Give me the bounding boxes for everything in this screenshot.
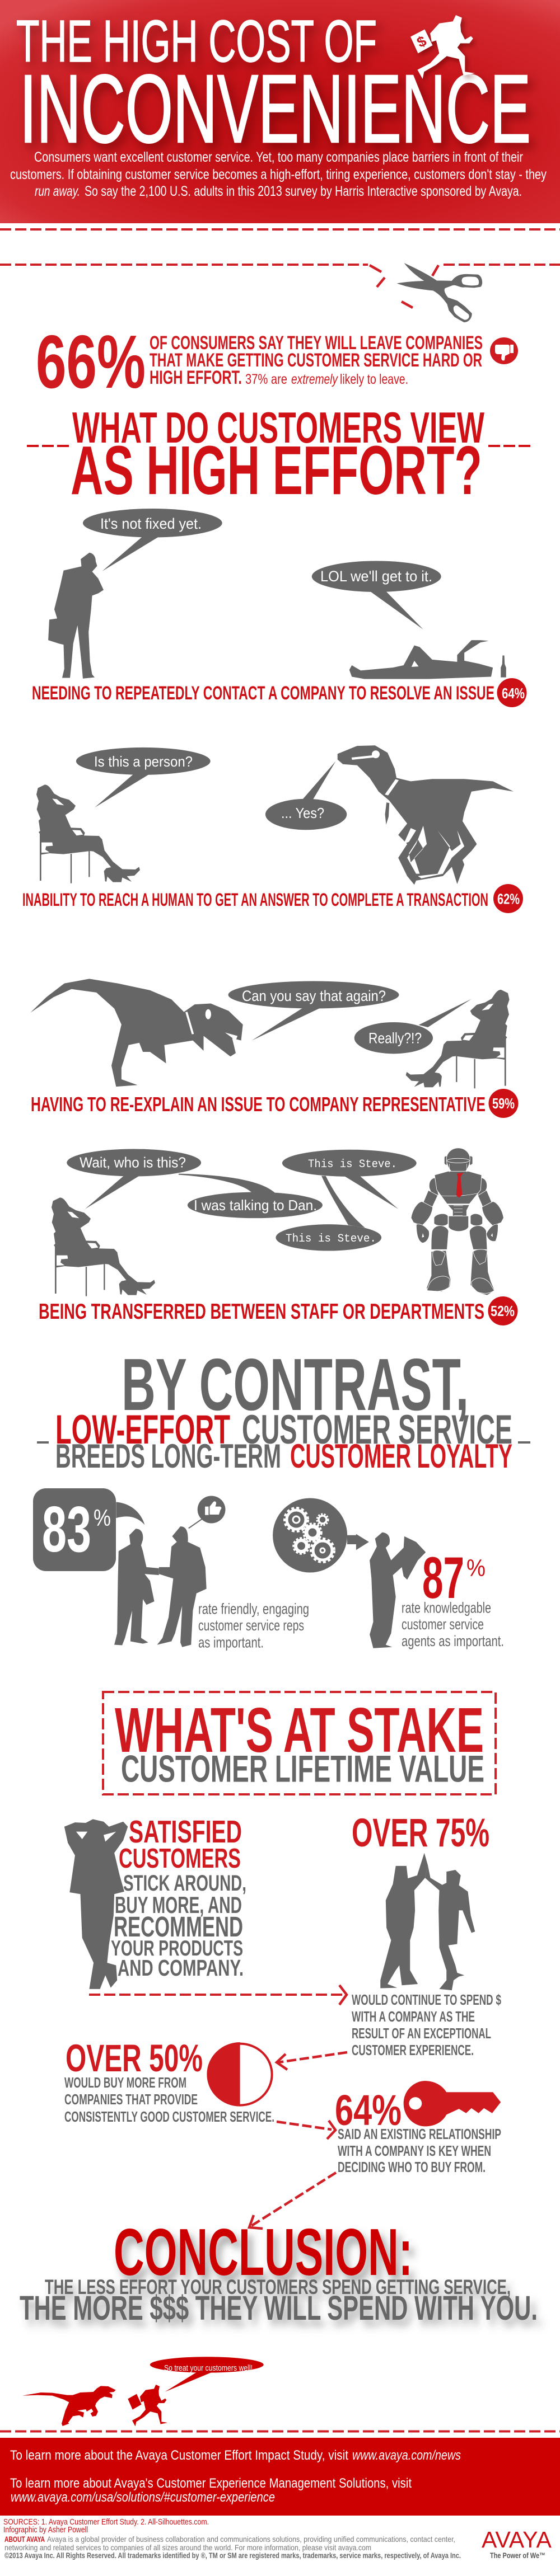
text: satisfied customers stick around: YOUR PRODUCTS: [111, 1936, 243, 1961]
logo: avaya: AVAYA: [482, 2527, 552, 2553]
stat: 87 percent: %: [466, 1555, 486, 1582]
figure: red raptor: [22, 2386, 116, 2426]
text: would continue to spend: CUSTOMER EXPERIENCE.: [352, 2042, 474, 2058]
stat: 66 percent: [36, 319, 518, 404]
footer: sources: SOURCES: 1. Avaya Customer Effort Study. 2. All-Silhouettes.com.: [3, 2517, 209, 2527]
text: would continue to spend: WITH A COMPANY AS THE: [352, 2008, 475, 2025]
icon: running man with briefcase: [410, 15, 475, 79]
icon: thumbs up: [189, 1496, 225, 1528]
footer: about avaya: ABOUT AVAYA: [4, 2535, 45, 2544]
figure: high five: [380, 1853, 475, 1990]
speech bubble: so treat your customers well: [150, 2357, 264, 2392]
panel: over 50 percent: [64, 2037, 274, 2125]
panel: over 75 percent: [352, 1811, 501, 2058]
subheading: low-effort customer service: [37, 1407, 530, 1452]
panel: 64 percent: [335, 2081, 501, 2175]
callout: 83 percent box: 83: [42, 1493, 91, 1566]
panel: raptor chasing businessman: [22, 2357, 264, 2427]
speech bubble: can you say that again: Can you say that again?: [242, 988, 386, 1004]
icon: scissors cutting dashed line: [0, 263, 560, 322]
speech bubble: this is steve bottom: This is Steve.: [286, 1233, 376, 1245]
speech bubble: it's not fixed yet: It's not fixed yet.: [100, 515, 202, 532]
link text: solutions: To learn more about Avaya's Customer Experience Management Solutions, visit: [10, 2476, 412, 2491]
figure: red running man: [128, 2385, 167, 2427]
text: satisfied customers stick around: AND COMPANY.: [118, 1955, 244, 1981]
heading box: what's at stake: [103, 1692, 496, 1794]
speech bubble: this is steve top: [282, 1150, 417, 1209]
panel: repeatedly contact a company: [32, 509, 526, 707]
speech bubble: really: [354, 999, 472, 1054]
speech bubble: lol we'll get to it: [312, 561, 441, 629]
stat description: HIGH EFFORT.: [150, 367, 242, 388]
badge: 62 percent: 62%: [497, 891, 520, 908]
badge: 59 percent: [488, 1089, 519, 1118]
speech bubble: lol we'll get to it: LOL we'll get to it.: [320, 568, 432, 585]
intro paragraph: run away.: [35, 184, 80, 199]
text: rate knowledgable: [402, 1599, 504, 1649]
panel: red header: [0, 0, 560, 223]
footer: about avaya: networking and related services to companies of all sizes around the world. For more information, please visit avaya.com: [4, 2543, 371, 2552]
stat description: likely to leave.: [340, 372, 408, 387]
speech bubble: is this a person: [76, 748, 211, 807]
figure: man on phone with briefcase: [48, 553, 104, 679]
icon: gears in circle: [273, 1498, 347, 1572]
text: rate knowledgable: rate knowledgable: [402, 1599, 491, 1616]
speech bubble: yes: ... Yes?: [281, 805, 324, 821]
arrow: gears to reader: [347, 1534, 369, 1550]
text: satisfied customers stick around: BUY MORE, AND: [115, 1892, 242, 1918]
speech bubble: so treat your customers well: So treat your customers well!: [164, 2363, 253, 2373]
panel: 83 percent friendly reps: [33, 1488, 309, 1651]
badge: 52 percent: [488, 1296, 517, 1325]
text: satisfied customers stick around: CUSTOMERS: [119, 1844, 241, 1874]
link text: solutions: www.avaya.com/usa/solutions/#customer-experience: [11, 2490, 275, 2505]
panel: over 75 percent: OVER 75%: [352, 1811, 489, 1855]
arrow: over 50 to 64: [277, 2121, 335, 2139]
text: rate knowledgable: customer service: [402, 1616, 484, 1633]
text: would buy more: CONSISTENTLY GOOD CUSTOMER SERVICE.: [64, 2108, 274, 2125]
speech bubble: is this a person: Is this a person?: [94, 753, 193, 770]
figure: seated woman: [52, 1197, 155, 1296]
footer: sources: [3, 2517, 209, 2535]
text: rate friendly: rate friendly, engaging: [198, 1600, 309, 1617]
text: said an existing relationship: WITH A COMPANY IS KEY WHEN: [338, 2142, 491, 2159]
badge: 62 percent: [493, 884, 523, 913]
heading: by contrast: [37, 1343, 530, 1475]
figure: man lying down with bottle: [349, 640, 506, 679]
arrow: 64 to conclusion: [249, 2173, 336, 2229]
speech bubble: i was talking to dan: I was talking to Dan.: [194, 1197, 317, 1214]
panel: 64 percent: 64%: [335, 2086, 402, 2135]
stat description: 37% are: [245, 372, 287, 387]
intro paragraph: [10, 149, 547, 199]
figure: relaxed man hands behind head: [64, 1819, 128, 1989]
link text: solutions: [10, 2476, 412, 2505]
text: would continue to spend: [352, 1991, 501, 2058]
callout: 83 percent box: %: [94, 1505, 111, 1531]
speech bubble: can you say that again: [228, 981, 399, 1041]
text: rate friendly: customer service reps: [198, 1617, 304, 1634]
panel: unable to reach a human: [22, 745, 523, 913]
callout: 83 percent box: [33, 1488, 144, 1571]
panel: being transferred: [39, 1148, 517, 1325]
speech bubble: yes: [265, 761, 347, 830]
text: said an existing relationship: DECIDING WHO TO BUY FROM.: [338, 2159, 486, 2175]
badge: 64 percent: 64%: [502, 685, 525, 702]
speech bubble: really: Really?!?: [368, 1030, 422, 1046]
text: satisfied customers stick around: STICK AROUND,: [123, 1871, 246, 1896]
figure: raptor with headset: [338, 745, 514, 885]
footer: about avaya: [4, 2535, 461, 2560]
arrow: satisfied to over 75: [89, 1985, 347, 2005]
footer: about avaya: Avaya is a global provider of business collaboration and communications solutions, providing unified communications, contact center,: [47, 2535, 455, 2544]
link text: impact study: To learn more about the Avaya Customer Effort Impact Study, visit: [10, 2448, 348, 2463]
text: would continue to spend: RESULT OF AN EXCEPTIONAL: [352, 2025, 491, 2042]
figure: t-rex with headset: [30, 979, 243, 1087]
speech bubble: wait who is this: Wait, who is this?: [80, 1154, 186, 1171]
panel: 87 percent knowledgeable agents: [273, 1498, 504, 1649]
stat description: extremely: [291, 372, 338, 387]
text: would buy more: COMPANIES THAT PROVIDE: [64, 2091, 198, 2108]
icon: thumbs down: [490, 337, 518, 364]
link text: impact study: www.avaya.com/news: [352, 2448, 461, 2463]
subheading: low-effort customer service: LOW-EFFORT: [55, 1407, 230, 1452]
figure: seated woman: [36, 784, 140, 883]
icon: half filled circle: [207, 2042, 272, 2107]
text: rate knowledgable: agents as important.: [402, 1633, 504, 1649]
speech bubble: this is steve bottom: [276, 1176, 381, 1251]
badge: 59 percent: 59%: [492, 1095, 515, 1112]
icon: key: [404, 2081, 501, 2126]
panel: red call to action band: [0, 2438, 560, 2516]
text: satisfied customers stick around: SATISFIED: [129, 1814, 242, 1850]
text: satisfied customers stick around: RECOMMEND: [114, 1911, 243, 1943]
stat description: [150, 332, 483, 388]
speech bubble: wait who is this: [67, 1149, 201, 1209]
text: rate friendly: [198, 1600, 309, 1651]
stat: 87 percent: 87: [422, 1545, 464, 1611]
text: said an existing relationship: [338, 2126, 501, 2175]
speech bubble: this is steve top: This is Steve.: [308, 1158, 397, 1171]
figure: robot with red tie: [411, 1148, 503, 1295]
panel: satisfied customers: [64, 1814, 246, 1989]
heading: conclusion: [20, 2215, 538, 2327]
text: rate friendly: as important.: [198, 1634, 264, 1651]
logo: avaya: The Power of We™: [490, 2551, 545, 2560]
arrow: over 75 to over 50: [277, 2052, 347, 2070]
badge: 52 percent: 52%: [491, 1303, 515, 1319]
figure: man reading document: [370, 1533, 426, 1648]
speech bubble: it's not fixed yet: [83, 509, 222, 571]
text: would buy more: WOULD BUY MORE FROM: [64, 2074, 186, 2091]
footer: sources: Infographic by Asher Powell: [3, 2525, 88, 2535]
stat: 66 percent: 66%: [36, 319, 146, 404]
text: satisfied customers stick around: [111, 1814, 246, 1981]
subheading: breeds long-term customer loyalty: BREEDS LONG-TERM: [55, 1437, 281, 1475]
figure: seated woman mirrored: [406, 990, 510, 1088]
badge: 64 percent: [497, 678, 526, 707]
panel: having to re-explain: [30, 979, 518, 1118]
panel: over 50 percent: OVER 50%: [66, 2037, 203, 2080]
heading: what do customers view as high effort: [27, 403, 532, 509]
speech bubble: i was talking to dan: [179, 1174, 323, 1218]
figure: two men shaking hands: [114, 1526, 207, 1647]
text: would buy more: [64, 2074, 274, 2125]
icon: running man with briefcase: $: [414, 32, 429, 50]
